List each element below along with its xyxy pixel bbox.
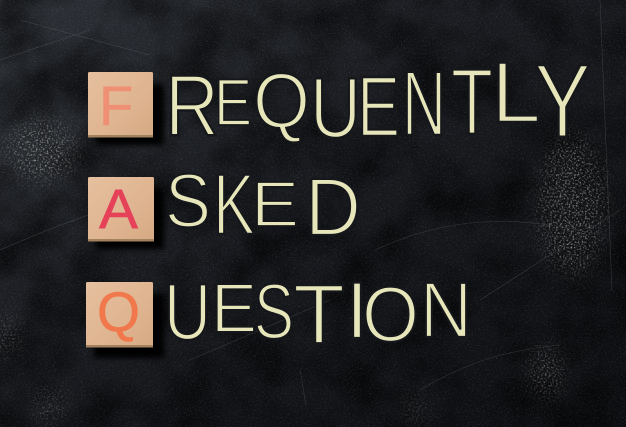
chalk word: ASKED: E xyxy=(251,168,299,240)
chalk word: QUESTION: S xyxy=(254,267,294,355)
chalk word: ASKED: K xyxy=(213,157,255,253)
chalk word: FREQUENTLY: L xyxy=(491,45,541,141)
chalk smudges xyxy=(0,120,604,424)
tile: A xyxy=(88,177,164,249)
chalk word: FREQUENTLY: N xyxy=(402,53,446,155)
chalk word: ASKED xyxy=(165,157,361,253)
chalk word: FREQUENTLY: U xyxy=(310,61,361,156)
chalk word: QUESTION: O xyxy=(362,270,419,358)
tile: Q: Q xyxy=(97,280,140,343)
tile: Q xyxy=(86,280,164,358)
chalk word: QUESTION: I xyxy=(345,266,369,356)
chalk word: QUESTION: E xyxy=(211,269,257,347)
chalk word: FREQUENTLY xyxy=(165,43,591,160)
chalk word: FREQUENTLY: Y xyxy=(534,43,591,160)
chalk word: FREQUENTLY: E xyxy=(214,65,252,139)
chalk word: ASKED: D xyxy=(305,162,361,253)
tile: A: A xyxy=(99,177,139,240)
chalk word: FREQUENTLY: Q xyxy=(253,57,310,145)
chalk word: QUESTION: T xyxy=(293,267,345,361)
chalk word: QUESTION: U xyxy=(164,267,211,356)
chalk word: FREQUENTLY: T xyxy=(451,49,493,154)
chalk word: QUESTION: N xyxy=(420,265,472,354)
chalk word: FREQUENTLY: E xyxy=(357,60,400,155)
chalk word: QUESTION xyxy=(164,265,472,361)
tile: F: F xyxy=(99,74,133,137)
chalk word: FREQUENTLY: R xyxy=(165,58,219,154)
chalk word: ASKED: S xyxy=(165,159,211,244)
tile: F xyxy=(88,72,164,145)
